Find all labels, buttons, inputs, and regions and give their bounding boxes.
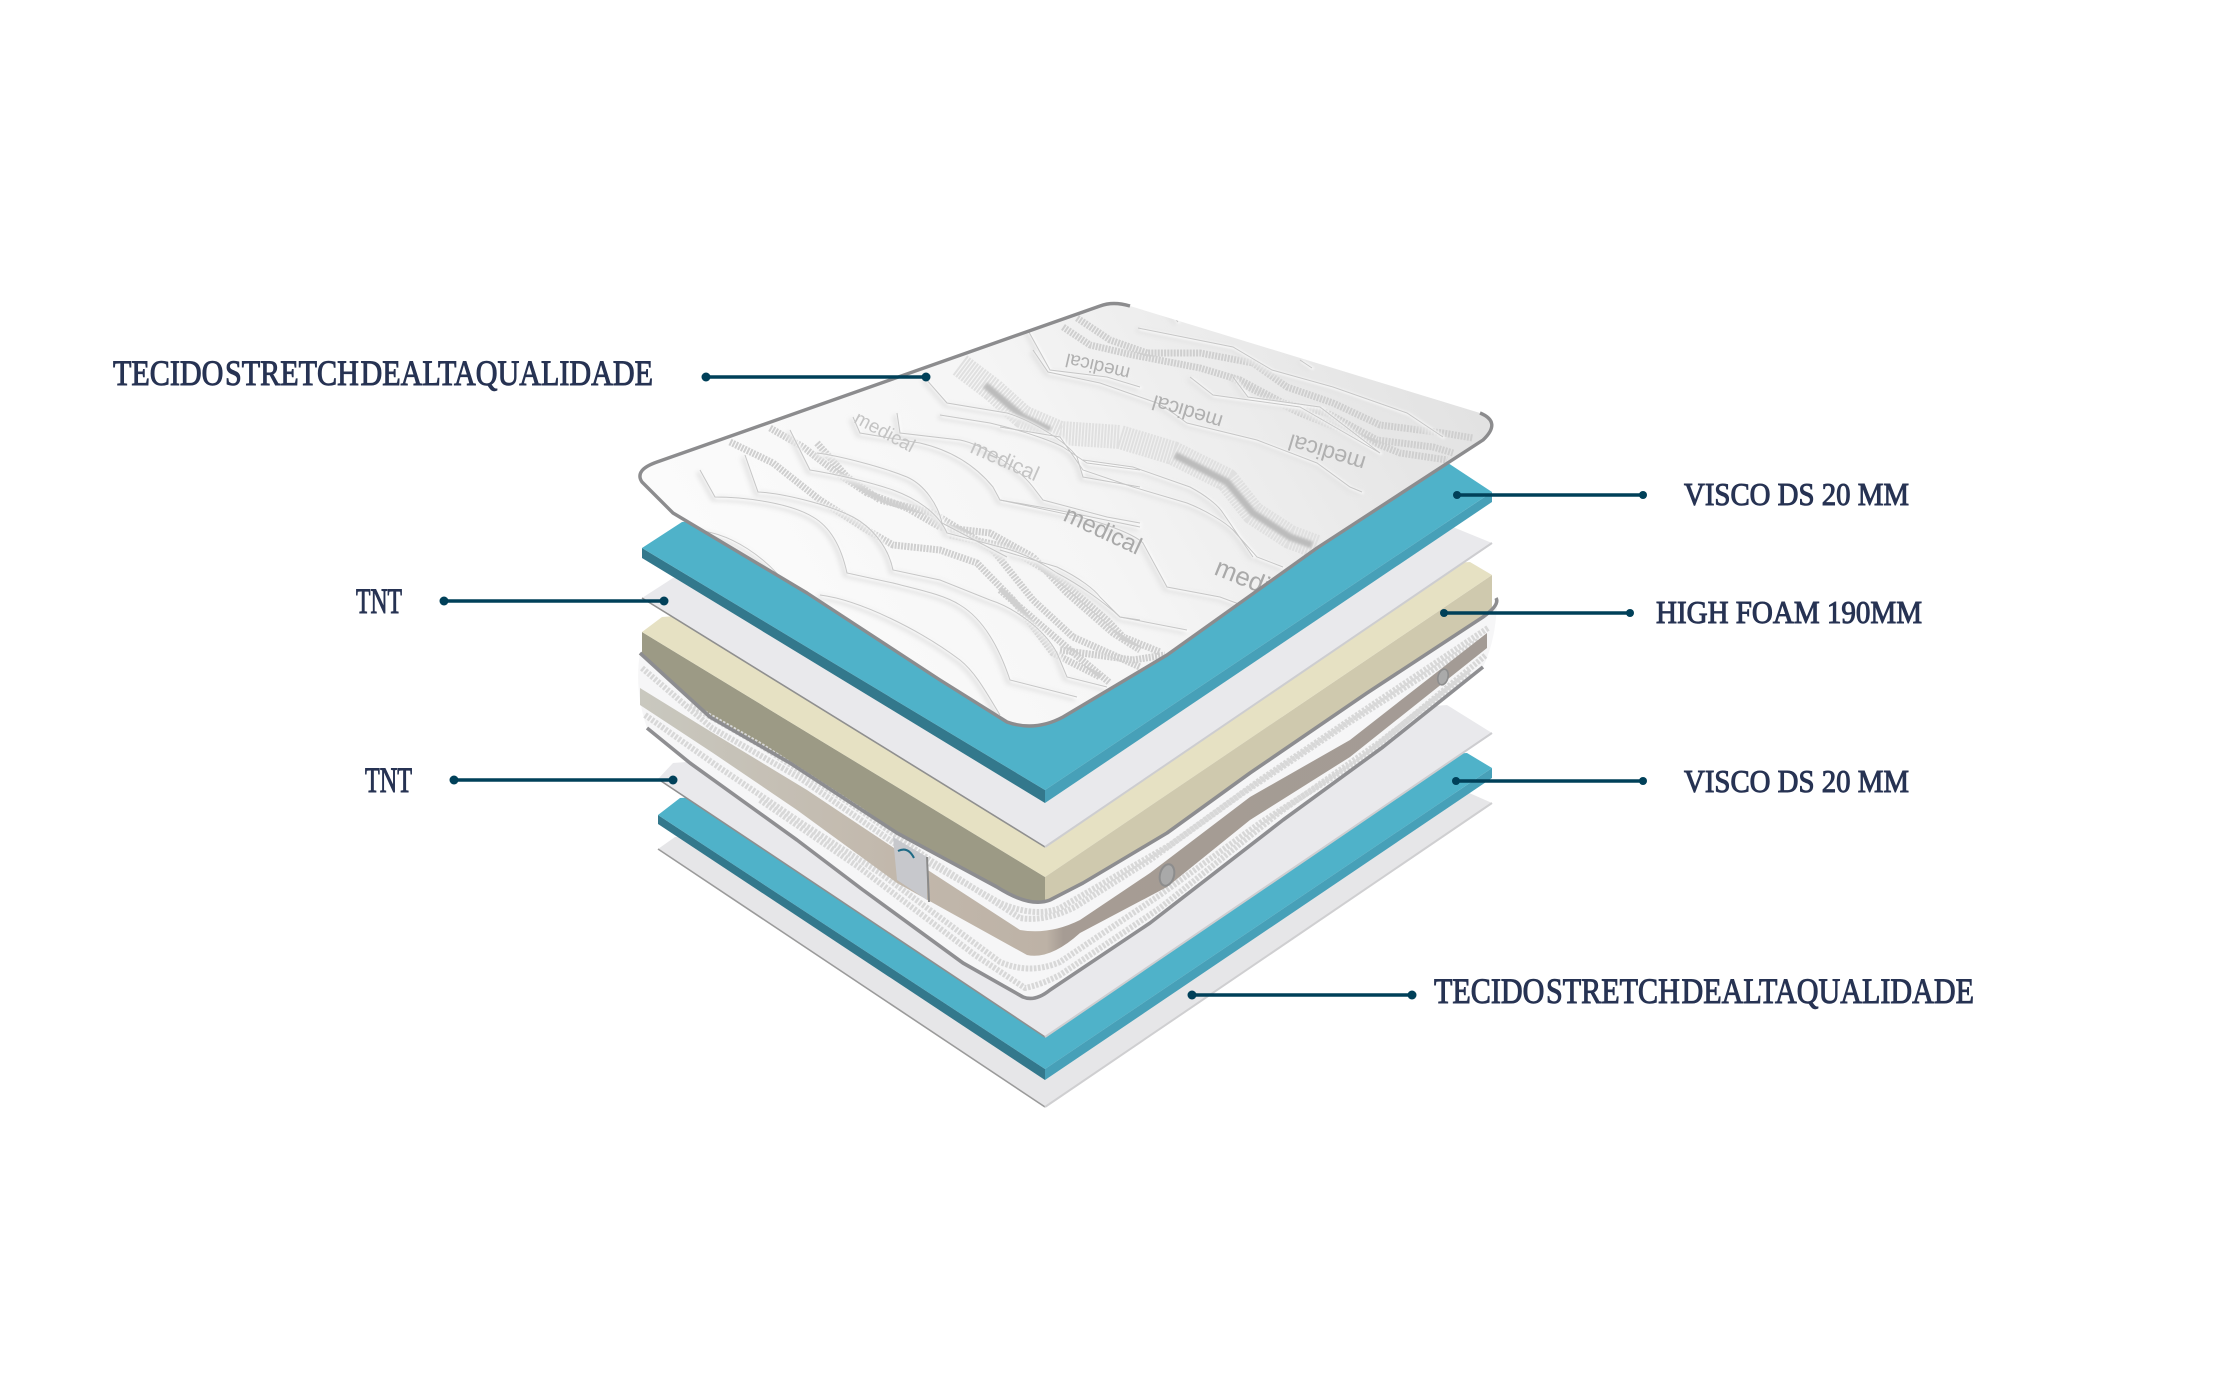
layer: upper TNT sheet	[642, 523, 1492, 847]
quilting highlight	[692, 311, 1444, 716]
dotted ribbons	[730, 318, 1473, 683]
layer: lower TNT sheet	[658, 705, 1492, 1037]
brand word: medical	[967, 436, 1042, 486]
layer: high foam block	[642, 562, 1492, 923]
brand word: medical	[1064, 348, 1132, 384]
mattress side fabric	[638, 602, 1497, 998]
brand word: medical	[851, 408, 918, 457]
layer: lower visco foam	[658, 753, 1492, 1080]
label: lower visco: VISCO DS 20 MM	[1684, 763, 1909, 799]
layer: bottom stretch fabric	[658, 792, 1492, 1107]
label: top fabric: TECIDO STRETCH DE ALTA QUALIDADE	[113, 353, 653, 393]
quilting and pattern	[688, 310, 1473, 717]
fabric stripes	[642, 628, 1488, 988]
ventilation button left	[1157, 863, 1177, 887]
layer: top quilted stretch fabric	[640, 304, 1492, 726]
label: lower TNT: TNT	[365, 760, 412, 800]
lower piping	[647, 667, 1483, 998]
label: bottom fabric: TECIDO STRETCH DE ALTA QUALIDADE	[1434, 971, 1974, 1011]
callout line: top fabric	[702, 372, 930, 382]
brand word: medical	[1150, 390, 1225, 433]
quilting lines	[690, 310, 1443, 715]
speckled central band	[960, 365, 1317, 547]
upper piping	[640, 598, 1497, 902]
brand word: medical	[1059, 501, 1146, 560]
callout line: high foam	[1440, 609, 1634, 617]
ventilation button right	[1436, 668, 1450, 686]
layer: upper visco foam	[642, 463, 1492, 803]
callout line: lower visco	[1452, 777, 1647, 785]
beige centre band	[640, 633, 1487, 956]
label: upper TNT: TNT	[356, 581, 402, 621]
brand word: medical	[1211, 552, 1305, 613]
topper surface	[640, 304, 1492, 726]
label: high foam: HIGH FOAM 190MM	[1656, 594, 1922, 630]
callout line: lower TNT	[450, 776, 678, 784]
layer: mattress core	[638, 598, 1497, 998]
topper piping	[640, 304, 1492, 726]
brand word: medical	[1285, 429, 1368, 477]
callout line: upper TNT	[440, 596, 668, 606]
label: upper visco: VISCO DS 20 MM	[1684, 476, 1909, 512]
quilting soft shadow	[688, 312, 1441, 717]
mattress tag	[893, 837, 929, 902]
callout line: upper visco	[1453, 491, 1647, 499]
callout line: bottom fabric	[1188, 990, 1416, 1000]
